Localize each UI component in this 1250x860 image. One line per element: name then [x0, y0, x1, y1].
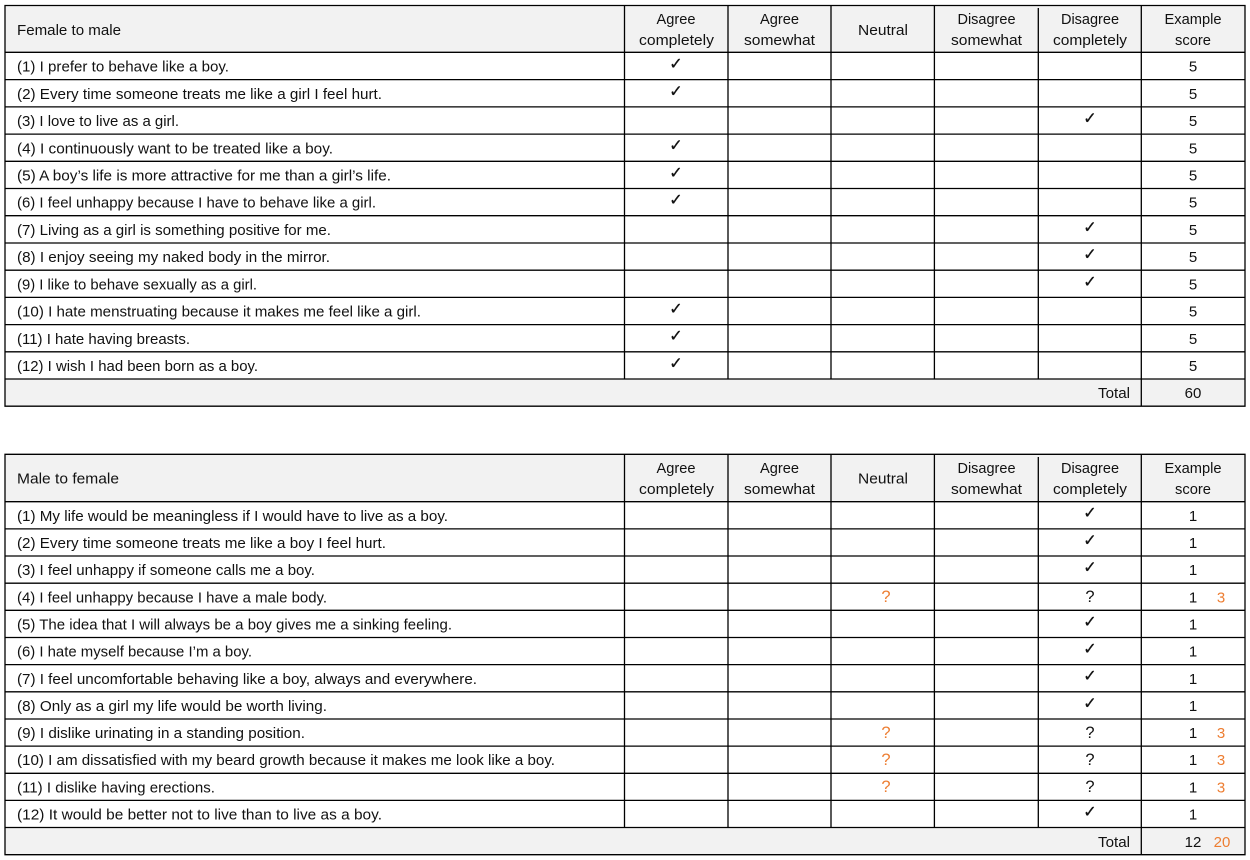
total row: 60	[1185, 385, 1201, 402]
row 12: (12) I wish I had been born as a boy.	[17, 358, 258, 375]
row 10: 5	[1189, 304, 1197, 321]
total row	[1098, 834, 1230, 851]
row 5: ✓	[1083, 612, 1097, 631]
row 4: 3	[1217, 589, 1225, 606]
row 11: (11) I hate having breasts.	[17, 331, 190, 348]
row 8: ✓	[1083, 245, 1097, 264]
row 6: 1	[1189, 644, 1197, 661]
row 8: (8) I enjoy seeing my naked body in the mirror.	[17, 249, 330, 266]
row 7: (7) Living as a girl is something positive for me.	[17, 222, 331, 239]
table header: male to female: somewhat	[951, 481, 1023, 498]
row 9: ?	[1085, 724, 1095, 742]
row 10	[17, 751, 1225, 769]
table header: female to male: completely	[639, 32, 715, 49]
row 2: (2) Every time someone treats me like a boy I feel hurt.	[17, 535, 386, 552]
row 12: 5	[1189, 358, 1197, 375]
row 2: ✓	[669, 81, 683, 100]
row 3: 5	[1189, 113, 1197, 130]
row 12	[17, 353, 1197, 375]
row 9	[17, 724, 1225, 742]
table header: female to male: score	[1175, 32, 1211, 49]
row 11: ?	[1085, 778, 1095, 796]
table header: male to female: Agree	[656, 460, 696, 477]
row 9: ?	[881, 724, 891, 742]
row 2: 5	[1189, 86, 1197, 103]
row 8: 1	[1189, 698, 1197, 715]
row 7	[17, 666, 1197, 688]
table header: female to male: Female to male	[17, 22, 121, 39]
table header: female to male: somewhat	[744, 32, 816, 49]
row 11: 5	[1189, 331, 1197, 348]
row 5	[17, 612, 1197, 634]
row 11	[17, 778, 1225, 796]
row 7: ✓	[1083, 666, 1097, 685]
row 9	[17, 272, 1197, 293]
row 8: ✓	[1083, 693, 1097, 712]
row 3: 1	[1189, 562, 1197, 579]
table header: female to male: somewhat	[951, 32, 1023, 49]
table header: male to female: completely	[1053, 481, 1128, 498]
row 2	[17, 81, 1197, 103]
row 9: 3	[1217, 725, 1225, 742]
row 4: ?	[881, 588, 891, 606]
row 4	[17, 588, 1225, 606]
row 11	[17, 326, 1197, 348]
table header: female to male: Disagree	[958, 11, 1016, 28]
row 11: ✓	[669, 326, 683, 345]
row 10: (10) I hate menstruating because it makes me feel like a girl.	[17, 304, 421, 321]
row 9: 1	[1189, 725, 1197, 742]
row 6: (6) I feel unhappy because I have to behave like a girl.	[17, 195, 376, 212]
row 12	[17, 802, 1197, 824]
row 7: 1	[1189, 671, 1197, 688]
row 5	[17, 163, 1197, 184]
row 5: 5	[1189, 168, 1197, 184]
total row: 20	[1214, 834, 1230, 851]
table header: female to male: Example	[1164, 11, 1222, 28]
row 3	[17, 558, 1197, 579]
table header: female to male	[17, 11, 1222, 49]
row 12: 1	[1189, 806, 1197, 824]
table header: female to male: completely	[1053, 32, 1128, 49]
row 9: 5	[1189, 276, 1197, 293]
row 3	[17, 108, 1197, 130]
row 6	[17, 190, 1197, 212]
row 8	[17, 245, 1197, 266]
row 5: 1	[1189, 616, 1197, 634]
table header: female to male: Neutral	[858, 22, 908, 39]
row 4: 1	[1189, 589, 1197, 606]
table header: female to male: Agree	[760, 11, 799, 28]
row 10: ?	[1085, 751, 1095, 769]
row 10: ?	[881, 751, 891, 769]
row 10: 3	[1217, 752, 1225, 769]
row 9: (9) I dislike urinating in a standing position.	[17, 725, 305, 742]
table header: male to female: Disagree	[1061, 460, 1119, 477]
row 1: ✓	[669, 54, 683, 73]
row 4: 5	[1189, 140, 1197, 157]
row 11: 3	[1217, 779, 1225, 796]
table header: male to female: completely	[639, 481, 715, 498]
row 12: ✓	[669, 353, 683, 372]
row 11: (11) I dislike having erections.	[17, 779, 215, 796]
row 1	[17, 54, 1197, 76]
row 6: 5	[1189, 195, 1197, 212]
row 12: (12) It would be better not to live than to live as a boy.	[17, 806, 382, 824]
table header: male to female: somewhat	[744, 481, 816, 498]
row 10: 1	[1189, 752, 1197, 769]
table header: male to female: score	[1175, 481, 1211, 498]
total row	[1098, 385, 1201, 402]
row 10: ✓	[669, 299, 683, 318]
table header: male to female: Disagree	[958, 460, 1016, 477]
row 3: (3) I love to live as a girl.	[17, 113, 179, 130]
row 8: 5	[1189, 249, 1197, 266]
table header: female to male: Agree	[656, 11, 696, 28]
row 8	[17, 693, 1197, 715]
row 7: (7) I feel uncomfortable behaving like a boy, always and everywhere.	[17, 671, 477, 688]
row 6: (6) I hate myself because I’m a boy.	[17, 644, 252, 661]
row 7: 5	[1189, 222, 1197, 239]
row 6	[17, 639, 1197, 661]
panel: female to male table	[5, 6, 1245, 406]
row 1: 5	[1189, 59, 1197, 76]
row 10: (10) I am dissatisfied with my beard growth because it makes me look like a boy.	[17, 752, 555, 769]
row 9: (9) I like to behave sexually as a girl.	[17, 276, 257, 293]
table header: male to female: Agree	[760, 460, 799, 477]
total row: Total	[1098, 834, 1130, 851]
row 1: 1	[1189, 508, 1197, 525]
total row: 12	[1185, 834, 1201, 851]
panel: male to female table	[5, 454, 1245, 855]
row 2: 1	[1189, 535, 1197, 552]
row 1: ✓	[1083, 503, 1097, 522]
row 6: ✓	[669, 190, 683, 209]
row 9: ✓	[1083, 272, 1097, 291]
row 6: ✓	[1083, 639, 1097, 658]
row 4	[17, 136, 1197, 157]
row 7	[17, 217, 1197, 239]
total row: Total	[1098, 385, 1130, 402]
row 3: (3) I feel unhappy if someone calls me a boy.	[17, 562, 315, 579]
table header: male to female	[17, 460, 1222, 498]
table header: male to female: Male to female	[17, 470, 119, 488]
row 5: ✓	[669, 163, 683, 182]
row 1	[17, 503, 1197, 525]
row 1: (1) My life would be meaningless if I would have to live as a boy.	[17, 508, 448, 525]
row 3: ✓	[1083, 558, 1097, 577]
row 1: (1) I prefer to behave like a boy.	[17, 59, 229, 76]
table header: female to male: Disagree	[1061, 11, 1119, 28]
row 5: (5) A boy’s life is more attractive for me than a girl’s life.	[17, 168, 391, 184]
row 12: ✓	[1083, 802, 1097, 821]
row 4: ?	[1085, 588, 1095, 606]
row 11: 1	[1189, 779, 1197, 796]
row 10	[17, 299, 1197, 321]
table header: male to female: Example	[1164, 460, 1222, 477]
row 4: (4) I feel unhappy because I have a male body.	[17, 589, 327, 606]
row 7: ✓	[1083, 217, 1097, 236]
row 2: ✓	[1083, 530, 1097, 549]
row 2: (2) Every time someone treats me like a girl I feel hurt.	[17, 86, 382, 103]
row 11: ?	[881, 778, 891, 796]
row 5: (5) The idea that I will always be a boy gives me a sinking feeling.	[17, 616, 452, 634]
row 4: (4) I continuously want to be treated like a boy.	[17, 140, 333, 157]
row 3: ✓	[1083, 108, 1097, 128]
row 2	[17, 530, 1197, 552]
table header: male to female: Neutral	[858, 470, 908, 488]
row 8: (8) Only as a girl my life would be worth living.	[17, 698, 327, 715]
row 4: ✓	[669, 136, 683, 155]
